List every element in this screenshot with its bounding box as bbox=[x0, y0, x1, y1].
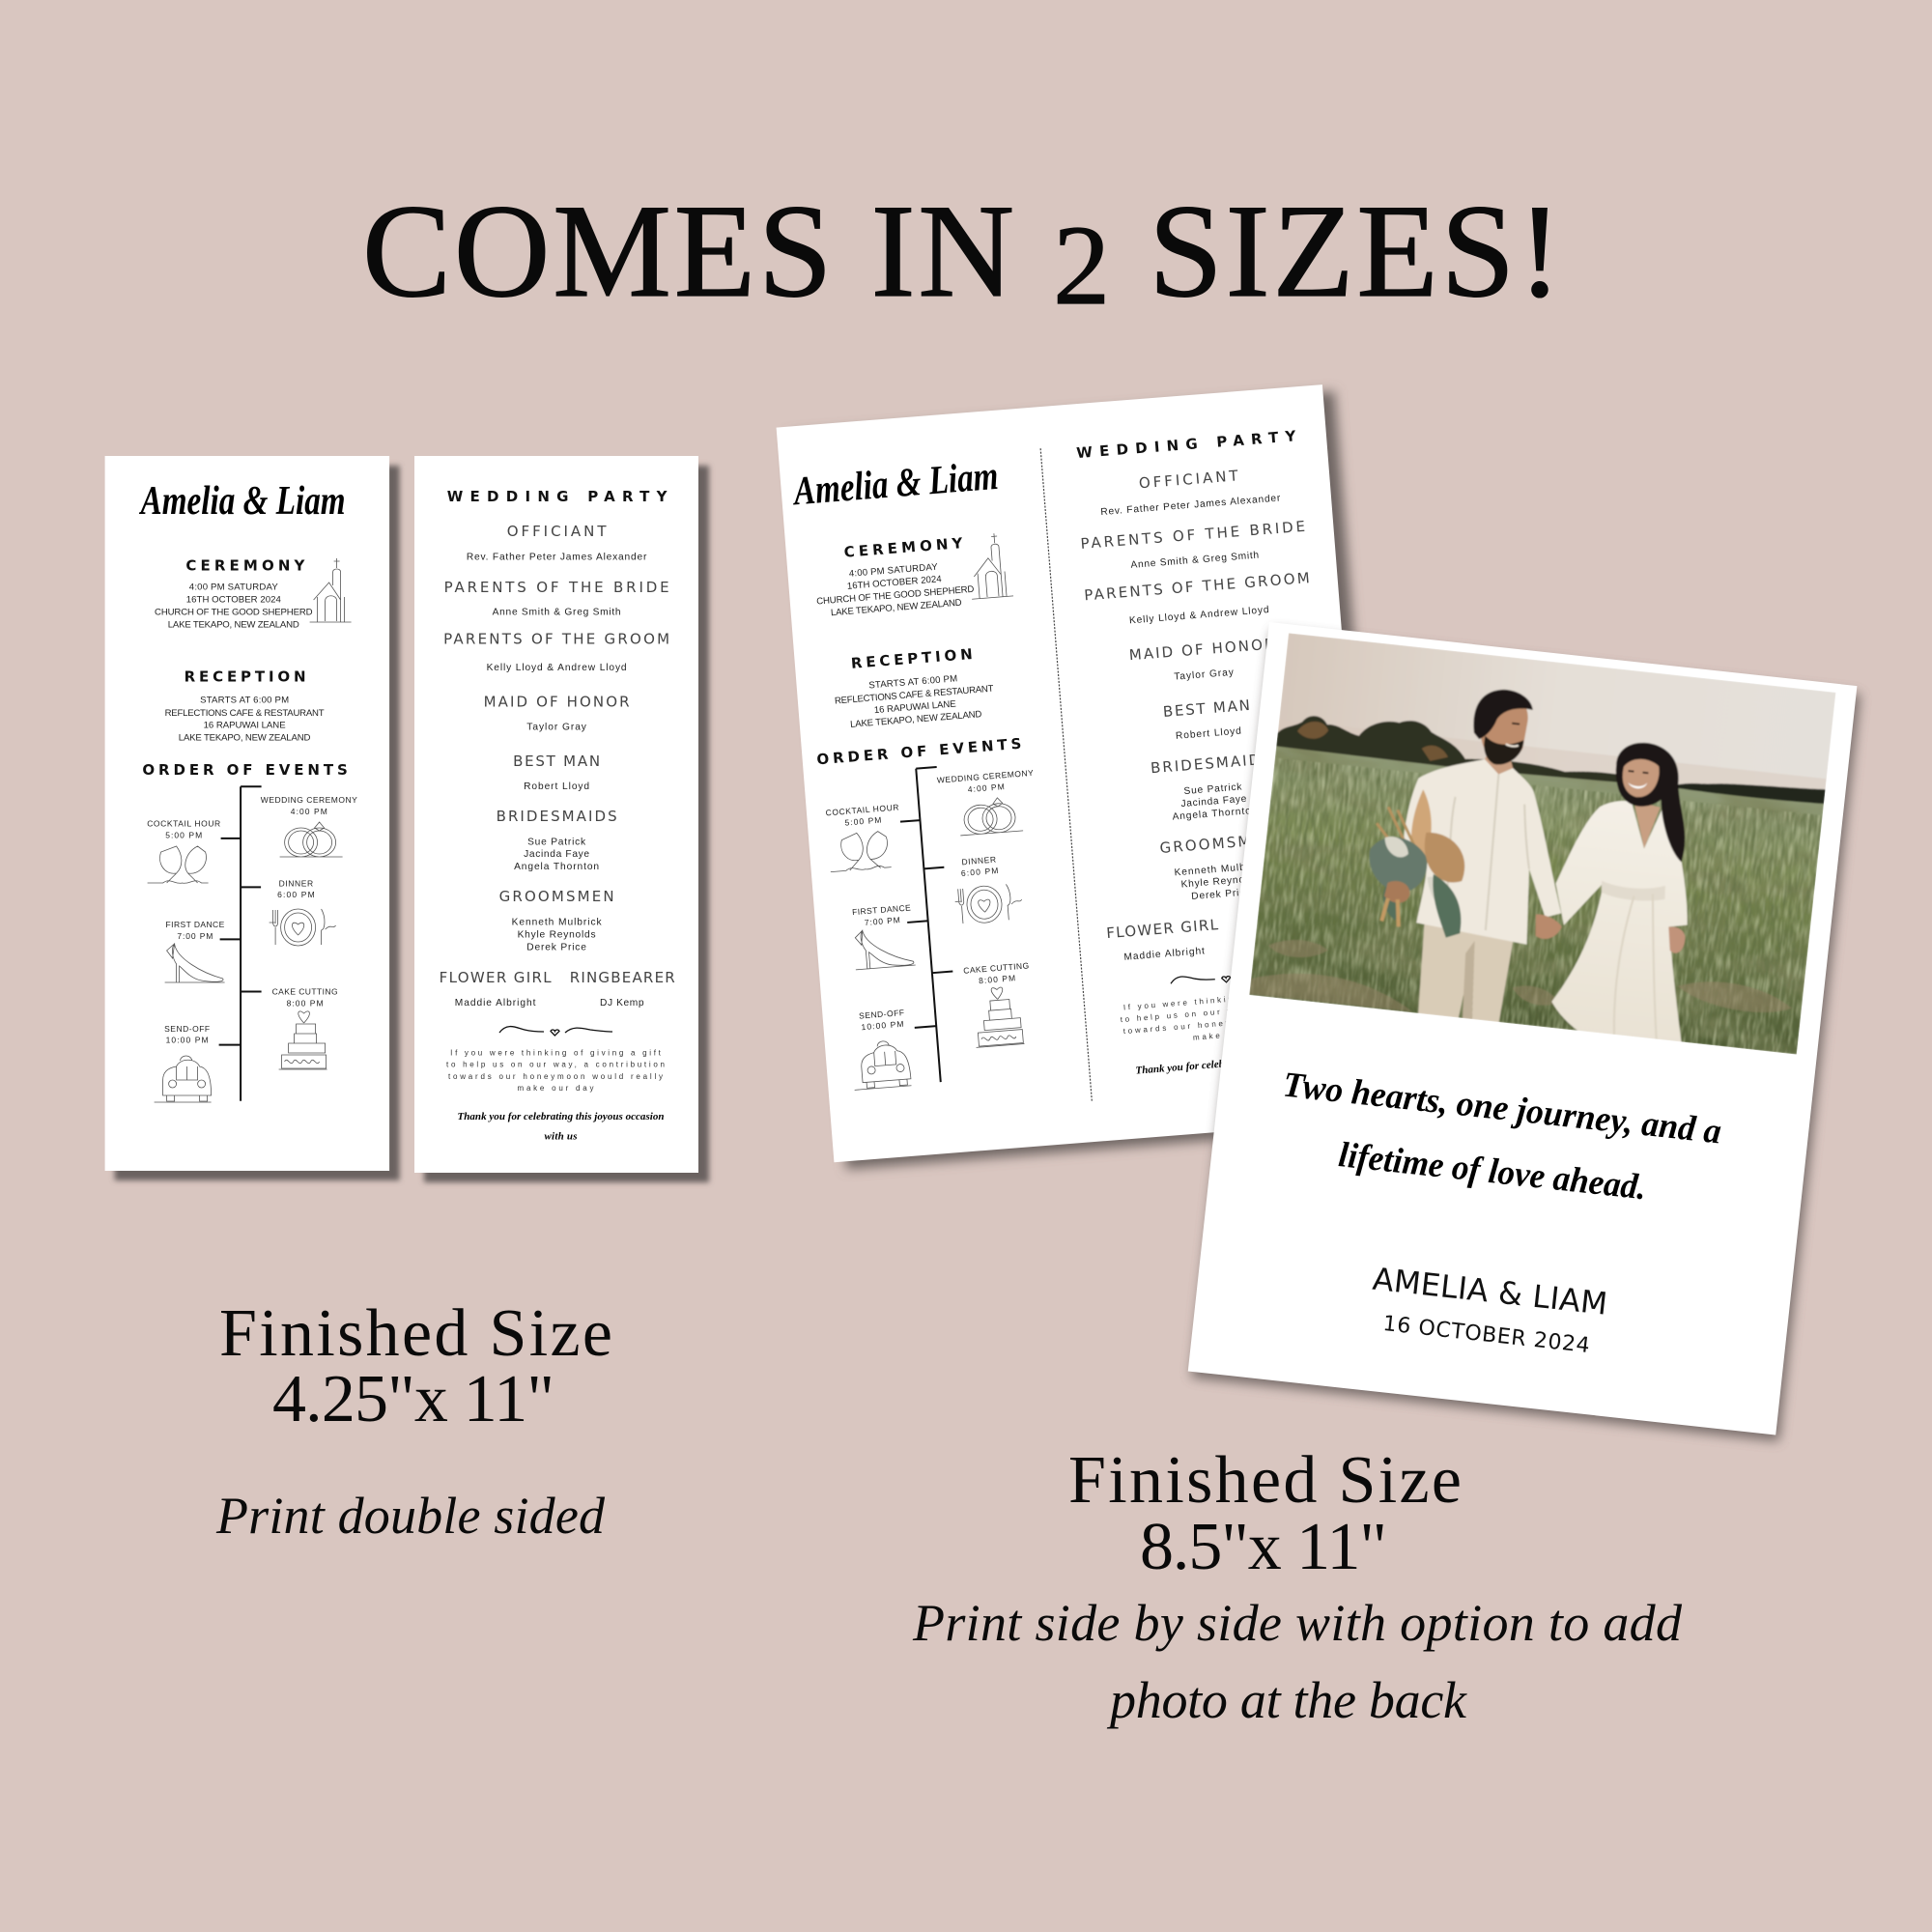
date: 16 OCTOBER 2024 bbox=[1381, 1312, 1591, 1358]
sheet icon: getaway car bbox=[851, 1039, 911, 1090]
woman bbox=[1551, 742, 1689, 1041]
party names list: RINGBEARER bbox=[570, 969, 675, 986]
caption: narrow size bbox=[219, 1296, 612, 1436]
sheet reception block: 16 RAPUWAI LANE bbox=[873, 699, 956, 716]
sheet timeline bbox=[895, 767, 961, 1084]
divider flourish with heart bbox=[499, 1027, 612, 1036]
sheet ceremony block: CEREMONY bbox=[843, 534, 964, 561]
sheet party names list: Angela Thornton bbox=[1172, 806, 1258, 823]
caption: narrow size: Finished Size bbox=[219, 1296, 612, 1371]
sheet party names list: BEST MAN bbox=[1162, 696, 1250, 721]
caption: print double sided: Print double sided bbox=[215, 1487, 606, 1545]
party names list: Robert Lloyd bbox=[524, 781, 589, 792]
sheet thank you note: with us bbox=[1223, 1075, 1257, 1090]
timeline labels: 6:00 PM bbox=[277, 890, 315, 899]
sheet party names list: PARENTS OF THE BRIDE bbox=[1080, 518, 1306, 553]
sheet timeline labels: WEDDING CEREMONY bbox=[937, 768, 1034, 785]
sheet ceremony block: CHURCH OF THE GOOD SHEPHERD bbox=[816, 584, 975, 608]
reception block: STARTS AT 6:00 PM bbox=[200, 696, 289, 706]
man bbox=[1403, 688, 1562, 1022]
sheet icon: high heel shoe bbox=[853, 926, 916, 970]
timeline labels bbox=[147, 795, 357, 1045]
timeline labels: DINNER bbox=[279, 878, 313, 888]
timeline labels: 4:00 PM bbox=[291, 807, 327, 816]
panel: tilted photo card bbox=[1187, 622, 1861, 1441]
caption: letter size: 8.5"x 11" bbox=[1140, 1510, 1387, 1584]
sheet reception block: STARTS AT 6:00 PM bbox=[868, 673, 958, 691]
party names list bbox=[440, 523, 675, 1009]
caption: print side by side bbox=[912, 1594, 1683, 1729]
sheet gift note bbox=[1119, 986, 1340, 1047]
sheet party names list: Kelly Lloyd & Andrew Lloyd bbox=[1129, 605, 1269, 626]
heading: couple names: Amelia & Liam bbox=[138, 479, 346, 524]
timeline labels: WEDDING CEREMONY bbox=[261, 795, 357, 805]
sheet party names list: MAID OF HONOR bbox=[1128, 635, 1275, 664]
timeline labels: SEND-OFF bbox=[164, 1024, 210, 1034]
party names list: Anne Smith & Greg Smith bbox=[493, 608, 621, 618]
sheet party names list: Robert Lloyd bbox=[1176, 726, 1242, 742]
party names list: MAID OF HONOR bbox=[484, 694, 630, 711]
ceremony block: 4:00 PM SATURDAY bbox=[189, 582, 278, 593]
sheet party names list: Kenneth Mulbrick bbox=[1174, 861, 1265, 878]
sheet party names list: Sue Patrick bbox=[1183, 781, 1243, 797]
icon: wedding rings bbox=[280, 822, 343, 857]
sheet party names list: Taylor Gray bbox=[1174, 668, 1235, 683]
timeline labels: 8:00 PM bbox=[287, 998, 324, 1008]
party names list: OFFICIANT bbox=[507, 523, 607, 540]
icon: wedding cake bbox=[279, 1011, 327, 1069]
sheet reception block: LAKE TEKAPO, NEW ZEALAND bbox=[850, 709, 982, 730]
heading: wedding party: WEDDING PARTY bbox=[447, 488, 668, 505]
sheet thank you note: Thank you for celebrating this joyous occasion bbox=[1135, 1049, 1342, 1077]
sheet gift note: make our day bbox=[1193, 1028, 1269, 1042]
sheet heading: couple names: Amelia & Liam bbox=[790, 454, 1000, 514]
couple names: AMELIA & LIAM bbox=[1371, 1261, 1609, 1322]
icon: church bbox=[310, 558, 352, 622]
icon: plate and cutlery bbox=[270, 909, 336, 946]
ceremony block: CEREMONY bbox=[185, 556, 306, 574]
sheet reception block bbox=[831, 644, 996, 731]
sheet icon: plate and cutlery bbox=[954, 883, 1023, 925]
gift note bbox=[446, 1048, 665, 1093]
heading: order of events: ORDER OF EVENTS bbox=[142, 761, 348, 779]
sheet party names list: GROOMSMEN bbox=[1159, 831, 1275, 857]
sheet gift note: If you were thinking of giving a gift bbox=[1123, 986, 1334, 1012]
sheet party names list bbox=[1070, 462, 1344, 964]
party names list: BRIDESMAIDS bbox=[497, 808, 617, 825]
gift note: If you were thinking of giving a gift bbox=[450, 1048, 662, 1057]
sheet party names list: OFFICIANT bbox=[1138, 467, 1239, 492]
icon: getaway car bbox=[155, 1056, 212, 1102]
party names list: Rev. Father Peter James Alexander bbox=[467, 553, 647, 563]
title: SIZES! bbox=[1113, 177, 1562, 325]
sheet gift note: towards our honeymoon would really bbox=[1122, 1010, 1337, 1036]
sheet reception block: REFLECTIONS CAFE & RESTAURANT bbox=[835, 684, 994, 707]
ceremony block bbox=[155, 556, 313, 630]
gift note: to help us on our way, a contribution bbox=[446, 1061, 665, 1069]
sheet timeline labels: 5:00 PM bbox=[844, 815, 882, 828]
timeline labels: COCKTAIL HOUR bbox=[147, 819, 220, 829]
sheet party names list: Derek Price bbox=[1191, 887, 1252, 902]
sheet icon: wedding rings bbox=[957, 796, 1023, 836]
sheet heading: wedding party: WEDDING PARTY bbox=[1076, 427, 1297, 462]
sheet timeline labels: 8:00 PM bbox=[979, 973, 1015, 985]
caption: letter size: Finished Size bbox=[1068, 1443, 1462, 1518]
icon: wine glasses bbox=[148, 846, 209, 883]
party names list: Taylor Gray bbox=[526, 723, 587, 733]
sheet party names list: RINGBEARER bbox=[1236, 906, 1342, 932]
party names list: GROOMSMEN bbox=[499, 888, 614, 905]
party names list: DJ Kemp bbox=[600, 998, 644, 1009]
hands bbox=[1533, 914, 1563, 941]
caption: print side by side: photo at the back bbox=[1106, 1671, 1467, 1729]
quote: Two hearts, one journey, and a bbox=[1281, 1065, 1723, 1151]
timeline bbox=[219, 786, 262, 1101]
thank you note bbox=[458, 1111, 665, 1143]
party names list: Khyle Reynolds bbox=[518, 929, 596, 940]
reception block bbox=[165, 668, 325, 743]
party names list: FLOWER GIRL bbox=[440, 969, 552, 986]
photo: couple in a field bbox=[1249, 633, 1836, 1055]
sheet party names list: Jacinda Faye bbox=[1180, 794, 1247, 810]
timeline labels: 7:00 PM bbox=[177, 931, 213, 941]
sheet party names list: PARENTS OF THE GROOM bbox=[1084, 569, 1310, 604]
sheet ceremony block: LAKE TEKAPO, NEW ZEALAND bbox=[831, 598, 962, 618]
bouquet bbox=[1369, 789, 1465, 939]
party names list: Kelly Lloyd & Andrew Lloyd bbox=[487, 663, 627, 673]
sheet ceremony block: 4:00 PM SATURDAY bbox=[849, 562, 939, 580]
reception block: RECEPTION bbox=[185, 668, 306, 686]
sheet left column bbox=[790, 453, 1058, 1092]
party names list: Angela Thornton bbox=[514, 862, 599, 872]
gift note: make our day bbox=[518, 1084, 593, 1093]
timeline labels: 10:00 PM bbox=[166, 1036, 209, 1045]
quote bbox=[1274, 1065, 1723, 1215]
panel: narrow program front bbox=[105, 456, 400, 1180]
caption: print side by side: Print side by side with option to add bbox=[912, 1594, 1683, 1652]
caption: letter size bbox=[1068, 1443, 1462, 1584]
sheet right column bbox=[1068, 427, 1354, 1097]
caption: narrow size: 4.25"x 11" bbox=[272, 1362, 554, 1436]
party names list: Kenneth Mulbrick bbox=[512, 918, 603, 928]
sheet ceremony block: 16TH OCTOBER 2024 bbox=[847, 574, 943, 592]
thank you note: with us bbox=[545, 1131, 578, 1143]
sheet heading: order of events: ORDER OF EVENTS bbox=[816, 735, 1022, 768]
sheet dotted fold line bbox=[1040, 448, 1092, 1102]
timeline labels: FIRST DANCE bbox=[166, 920, 225, 929]
reception block: LAKE TEKAPO, NEW ZEALAND bbox=[179, 732, 310, 743]
sheet icon: wedding cake bbox=[972, 985, 1024, 1047]
reception block: REFLECTIONS CAFE & RESTAURANT bbox=[165, 708, 325, 719]
sheet timeline labels: CAKE CUTTING bbox=[963, 960, 1029, 976]
reception block: 16 RAPUWAI LANE bbox=[204, 721, 286, 731]
sheet timeline labels: 4:00 PM bbox=[967, 781, 1005, 794]
party names list: Sue Patrick bbox=[527, 837, 586, 848]
sheet party names list: Anne Smith & Greg Smith bbox=[1130, 551, 1260, 571]
ceremony block: CHURCH OF THE GOOD SHEPHERD bbox=[155, 608, 313, 618]
sheet party names list: Maddie Albright bbox=[1123, 946, 1206, 963]
sheet timeline labels: 10:00 PM bbox=[861, 1019, 904, 1032]
sheet party names list: Rev. Father Peter James Alexander bbox=[1100, 493, 1281, 518]
sheet gift note: to help us on our way, a contribution bbox=[1120, 998, 1338, 1024]
title: COMES IN bbox=[362, 177, 1014, 325]
sheet timeline labels: 7:00 PM bbox=[864, 915, 900, 927]
sheet thank you note bbox=[1135, 1049, 1344, 1096]
party names list: Derek Price bbox=[526, 943, 586, 953]
sheet timeline labels: FIRST DANCE bbox=[852, 902, 911, 917]
sheet icon: wine glasses bbox=[828, 831, 892, 872]
title: 2 bbox=[1053, 202, 1110, 328]
sheet divider flourish with heart bbox=[1171, 969, 1284, 986]
party names list: BEST MAN bbox=[513, 753, 600, 770]
panel: narrow program back bbox=[414, 456, 709, 1182]
sheet party names list: BRIDESMAIDS bbox=[1150, 751, 1271, 777]
timeline labels: CAKE CUTTING bbox=[272, 987, 338, 997]
party names list: Maddie Albright bbox=[455, 998, 536, 1009]
sheet party names list: DJ Kemp bbox=[1268, 937, 1313, 952]
party names list: PARENTS OF THE BRIDE bbox=[444, 579, 669, 596]
timeline labels: 5:00 PM bbox=[165, 830, 202, 839]
sheet timeline labels: 6:00 PM bbox=[960, 866, 999, 878]
sheet timeline labels: COCKTAIL HOUR bbox=[825, 802, 899, 817]
panel: tilted side by side sheet bbox=[777, 384, 1392, 1170]
sheet party names list: FLOWER GIRL bbox=[1106, 916, 1219, 942]
sheet timeline labels: DINNER bbox=[961, 855, 996, 867]
party names list: PARENTS OF THE GROOM bbox=[443, 630, 669, 647]
ceremony block: LAKE TEKAPO, NEW ZEALAND bbox=[168, 620, 299, 630]
party names list: Jacinda Faye bbox=[524, 849, 589, 860]
ceremony block: 16TH OCTOBER 2024 bbox=[186, 595, 281, 605]
sheet party names list: Khyle Reynolds bbox=[1180, 873, 1260, 891]
sheet timeline labels bbox=[823, 768, 1053, 1034]
gift note: towards our honeymoon would really bbox=[448, 1072, 663, 1081]
thank you note: Thank you for celebrating this joyous occasion bbox=[458, 1111, 665, 1122]
sheet ceremony block bbox=[812, 534, 976, 619]
quote: lifetime of love ahead. bbox=[1337, 1135, 1648, 1208]
sheet icon: church bbox=[967, 532, 1013, 599]
sheet reception block: RECEPTION bbox=[850, 645, 973, 672]
sheet timeline labels: SEND-OFF bbox=[859, 1008, 904, 1021]
icon: high heel shoe bbox=[165, 944, 225, 982]
